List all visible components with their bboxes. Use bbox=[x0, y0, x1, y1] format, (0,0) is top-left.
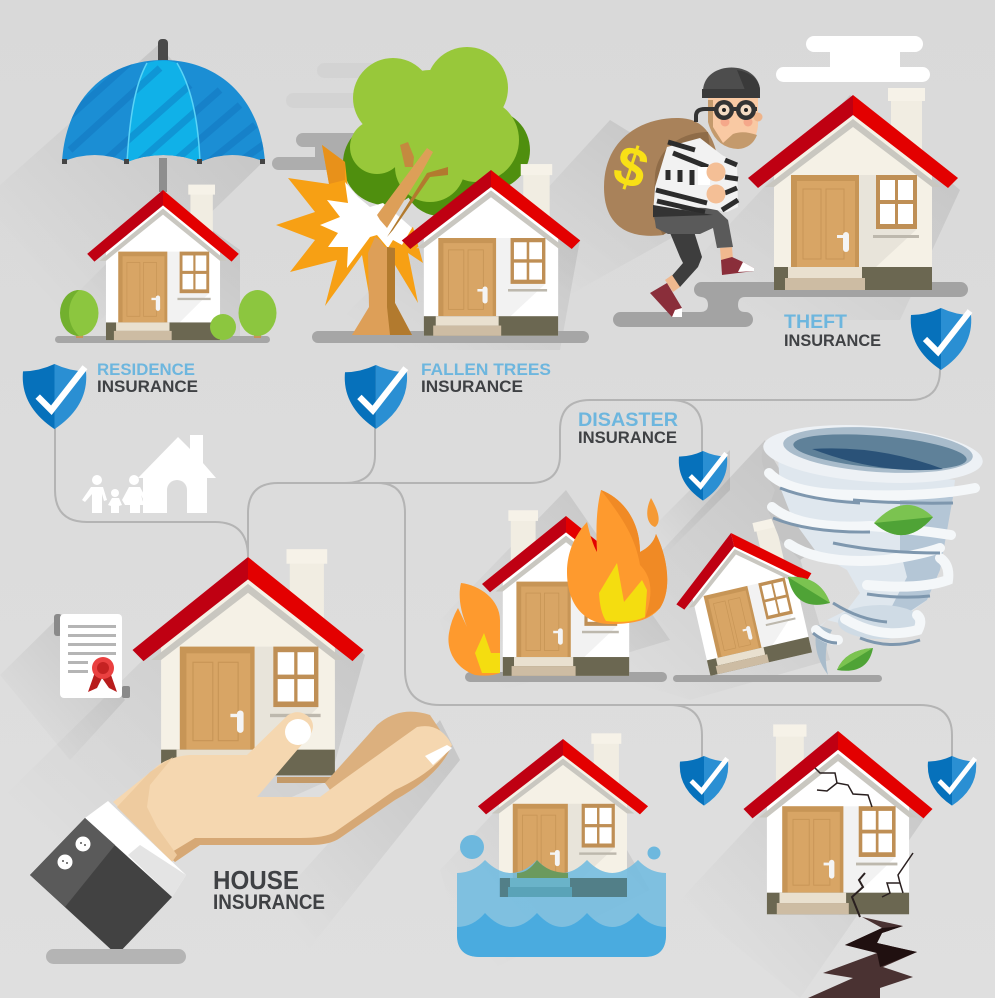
shield badges bbox=[23, 308, 976, 806]
chimney: tilted house bbox=[752, 518, 788, 575]
ground bar bbox=[673, 675, 882, 682]
tree trunk bbox=[352, 142, 448, 335]
wall cracks bbox=[815, 768, 913, 917]
chimney: fallen trees bbox=[521, 164, 552, 230]
cuff and hands bbox=[698, 162, 726, 204]
house: flood bbox=[478, 739, 648, 897]
small flame bbox=[448, 583, 500, 676]
tree crown bbox=[343, 47, 530, 216]
shield: disaster bbox=[679, 451, 727, 501]
panel: residence insurance bbox=[55, 39, 276, 343]
panel: house insurance (central) bbox=[30, 549, 452, 964]
chimney: fire bbox=[508, 510, 538, 573]
text: disaster insurance: DISASTER bbox=[578, 410, 678, 431]
shoes bbox=[721, 257, 754, 275]
loot sack bbox=[604, 118, 718, 236]
panel: tornado bbox=[663, 418, 985, 682]
text: theft insurance: THEFT bbox=[784, 312, 847, 333]
ground bar bbox=[312, 331, 589, 343]
chimney: residence bbox=[188, 185, 215, 244]
text: theft insurance: INSURANCE bbox=[784, 331, 881, 350]
text: residence insurance bbox=[97, 360, 198, 396]
ground bars bbox=[613, 282, 968, 327]
trousers bbox=[653, 208, 733, 248]
house: theft bbox=[748, 95, 958, 290]
shield: theft bbox=[911, 308, 971, 370]
panel: flood bbox=[457, 733, 666, 957]
panel: fire bbox=[448, 490, 667, 682]
chimney: central bbox=[286, 549, 327, 635]
explosion burst bbox=[276, 145, 423, 306]
text: disaster insurance: INSURANCE bbox=[578, 428, 677, 447]
hat bbox=[703, 68, 760, 90]
house: fire bbox=[482, 516, 650, 676]
shield: residence bbox=[23, 364, 86, 429]
leaves bbox=[788, 505, 933, 671]
ground bar bbox=[55, 336, 270, 343]
icon: family and home bbox=[82, 435, 216, 513]
tilted house bbox=[663, 517, 829, 680]
text: disaster insurance bbox=[578, 410, 678, 447]
chimney: theft bbox=[888, 88, 925, 165]
tornado funnel bbox=[761, 418, 985, 675]
hand bbox=[113, 712, 452, 862]
ground bar bbox=[465, 672, 667, 682]
panel: fallen trees insurance bbox=[276, 47, 589, 343]
certificate bbox=[54, 614, 130, 698]
house: central bbox=[132, 557, 364, 775]
house: fallen trees bbox=[402, 170, 580, 336]
big flame bbox=[567, 490, 667, 624]
shrubs bbox=[60, 290, 276, 340]
white cloud bbox=[776, 36, 930, 82]
ground crack bbox=[808, 917, 917, 998]
text: residence insurance: INSURANCE bbox=[97, 377, 198, 396]
panel: earthquake bbox=[744, 724, 932, 998]
thief bbox=[604, 68, 762, 317]
chimney: flood bbox=[591, 733, 621, 796]
shield: fallen trees bbox=[345, 365, 407, 429]
lower leg bbox=[668, 225, 702, 287]
dollar sign: $ bbox=[607, 132, 656, 201]
text: theft insurance bbox=[784, 312, 881, 350]
text: fallen trees insurance: INSURANCE bbox=[421, 377, 523, 396]
house: residence bbox=[87, 190, 239, 340]
mask glasses bbox=[696, 100, 757, 122]
head bbox=[708, 96, 758, 148]
text: fallen trees insurance bbox=[421, 360, 551, 396]
shield: flood bbox=[680, 756, 728, 806]
house: earthquake bbox=[744, 731, 932, 914]
flood water bbox=[457, 835, 666, 957]
connector lines bbox=[55, 340, 952, 765]
hand ground bar bbox=[46, 949, 186, 964]
text: house insurance: HOUSE bbox=[213, 865, 299, 895]
panel: theft insurance bbox=[604, 68, 968, 327]
suit sleeve bbox=[30, 801, 186, 955]
text: house insurance: INSURANCE bbox=[213, 891, 325, 914]
shield: earthquake bbox=[928, 756, 976, 806]
striped shirt bbox=[653, 138, 738, 213]
text: house insurance bbox=[213, 865, 325, 914]
text: fallen trees insurance: FALLEN TREES bbox=[421, 360, 551, 379]
grey cloud streaks bbox=[272, 63, 377, 170]
umbrella bbox=[60, 39, 270, 192]
chimney: earthquake bbox=[773, 724, 806, 797]
text: residence insurance: RESIDENCE bbox=[97, 360, 195, 379]
